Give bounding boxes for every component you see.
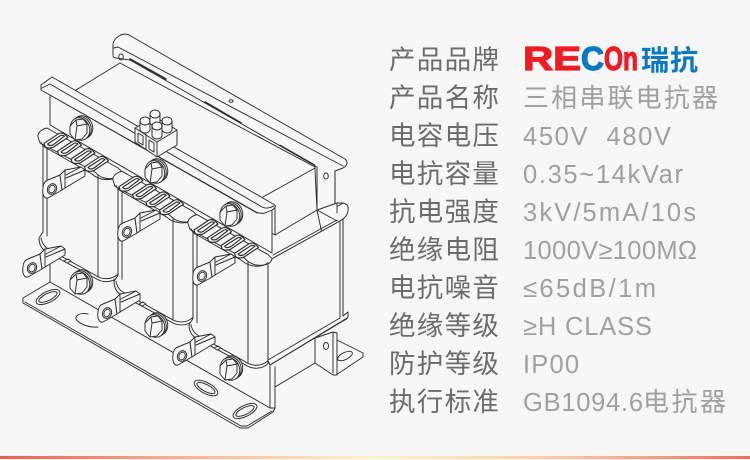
spec values: GB1094.6	[523, 389, 643, 417]
spec values	[523, 83, 726, 417]
right rear foot	[275, 332, 363, 387]
cable lugs	[23, 167, 235, 365]
back plate	[113, 34, 347, 213]
spec values: 三相串联电抗器	[523, 83, 718, 113]
left coil	[39, 140, 118, 282]
bottom mounting foot	[23, 253, 275, 428]
spec values: ≤65dB/1m	[523, 275, 656, 303]
spec values: 电抗器	[643, 387, 726, 417]
logo: 瑞抗	[641, 39, 698, 79]
bottom gradient bar	[0, 456, 750, 459]
lower front plate	[270, 365, 275, 408]
middle coil	[114, 183, 193, 325]
spec values: 450V 480V	[523, 123, 671, 151]
spec labels: 产品品牌	[389, 45, 500, 75]
logo: On	[604, 40, 638, 77]
spec labels: 电抗噪音	[389, 273, 500, 303]
logo: C	[581, 40, 604, 77]
spec labels: 绝缘等级	[389, 311, 500, 341]
lower bolts	[67, 267, 246, 383]
core block	[76, 63, 317, 235]
spec labels	[389, 45, 500, 417]
spec labels: 防护等级	[389, 349, 500, 379]
spec labels: 抗电强度	[389, 197, 500, 227]
front plate	[41, 77, 275, 253]
right coil	[189, 203, 348, 368]
reactor line drawing	[23, 34, 363, 428]
top bolts	[67, 113, 246, 229]
spec labels: 产品名称	[389, 83, 500, 113]
spec labels: 执行标准	[389, 387, 500, 417]
spec values: 1000V≥100MΩ	[523, 237, 697, 265]
terminal block	[135, 110, 177, 157]
spec labels: 电容电压	[389, 121, 500, 151]
spec values: IP00	[523, 351, 579, 379]
logo: RE	[523, 40, 581, 77]
spec values: 3kV/5mA/10s	[523, 199, 696, 227]
small tabs	[64, 259, 221, 350]
spec values: 0.35~14kVar	[523, 161, 684, 189]
windings	[38, 128, 272, 266]
logo	[523, 39, 698, 79]
spec labels: 绝缘电阻	[389, 235, 500, 265]
spec values: ≥H CLASS	[523, 313, 652, 341]
spec labels: 电抗容量	[389, 159, 500, 189]
